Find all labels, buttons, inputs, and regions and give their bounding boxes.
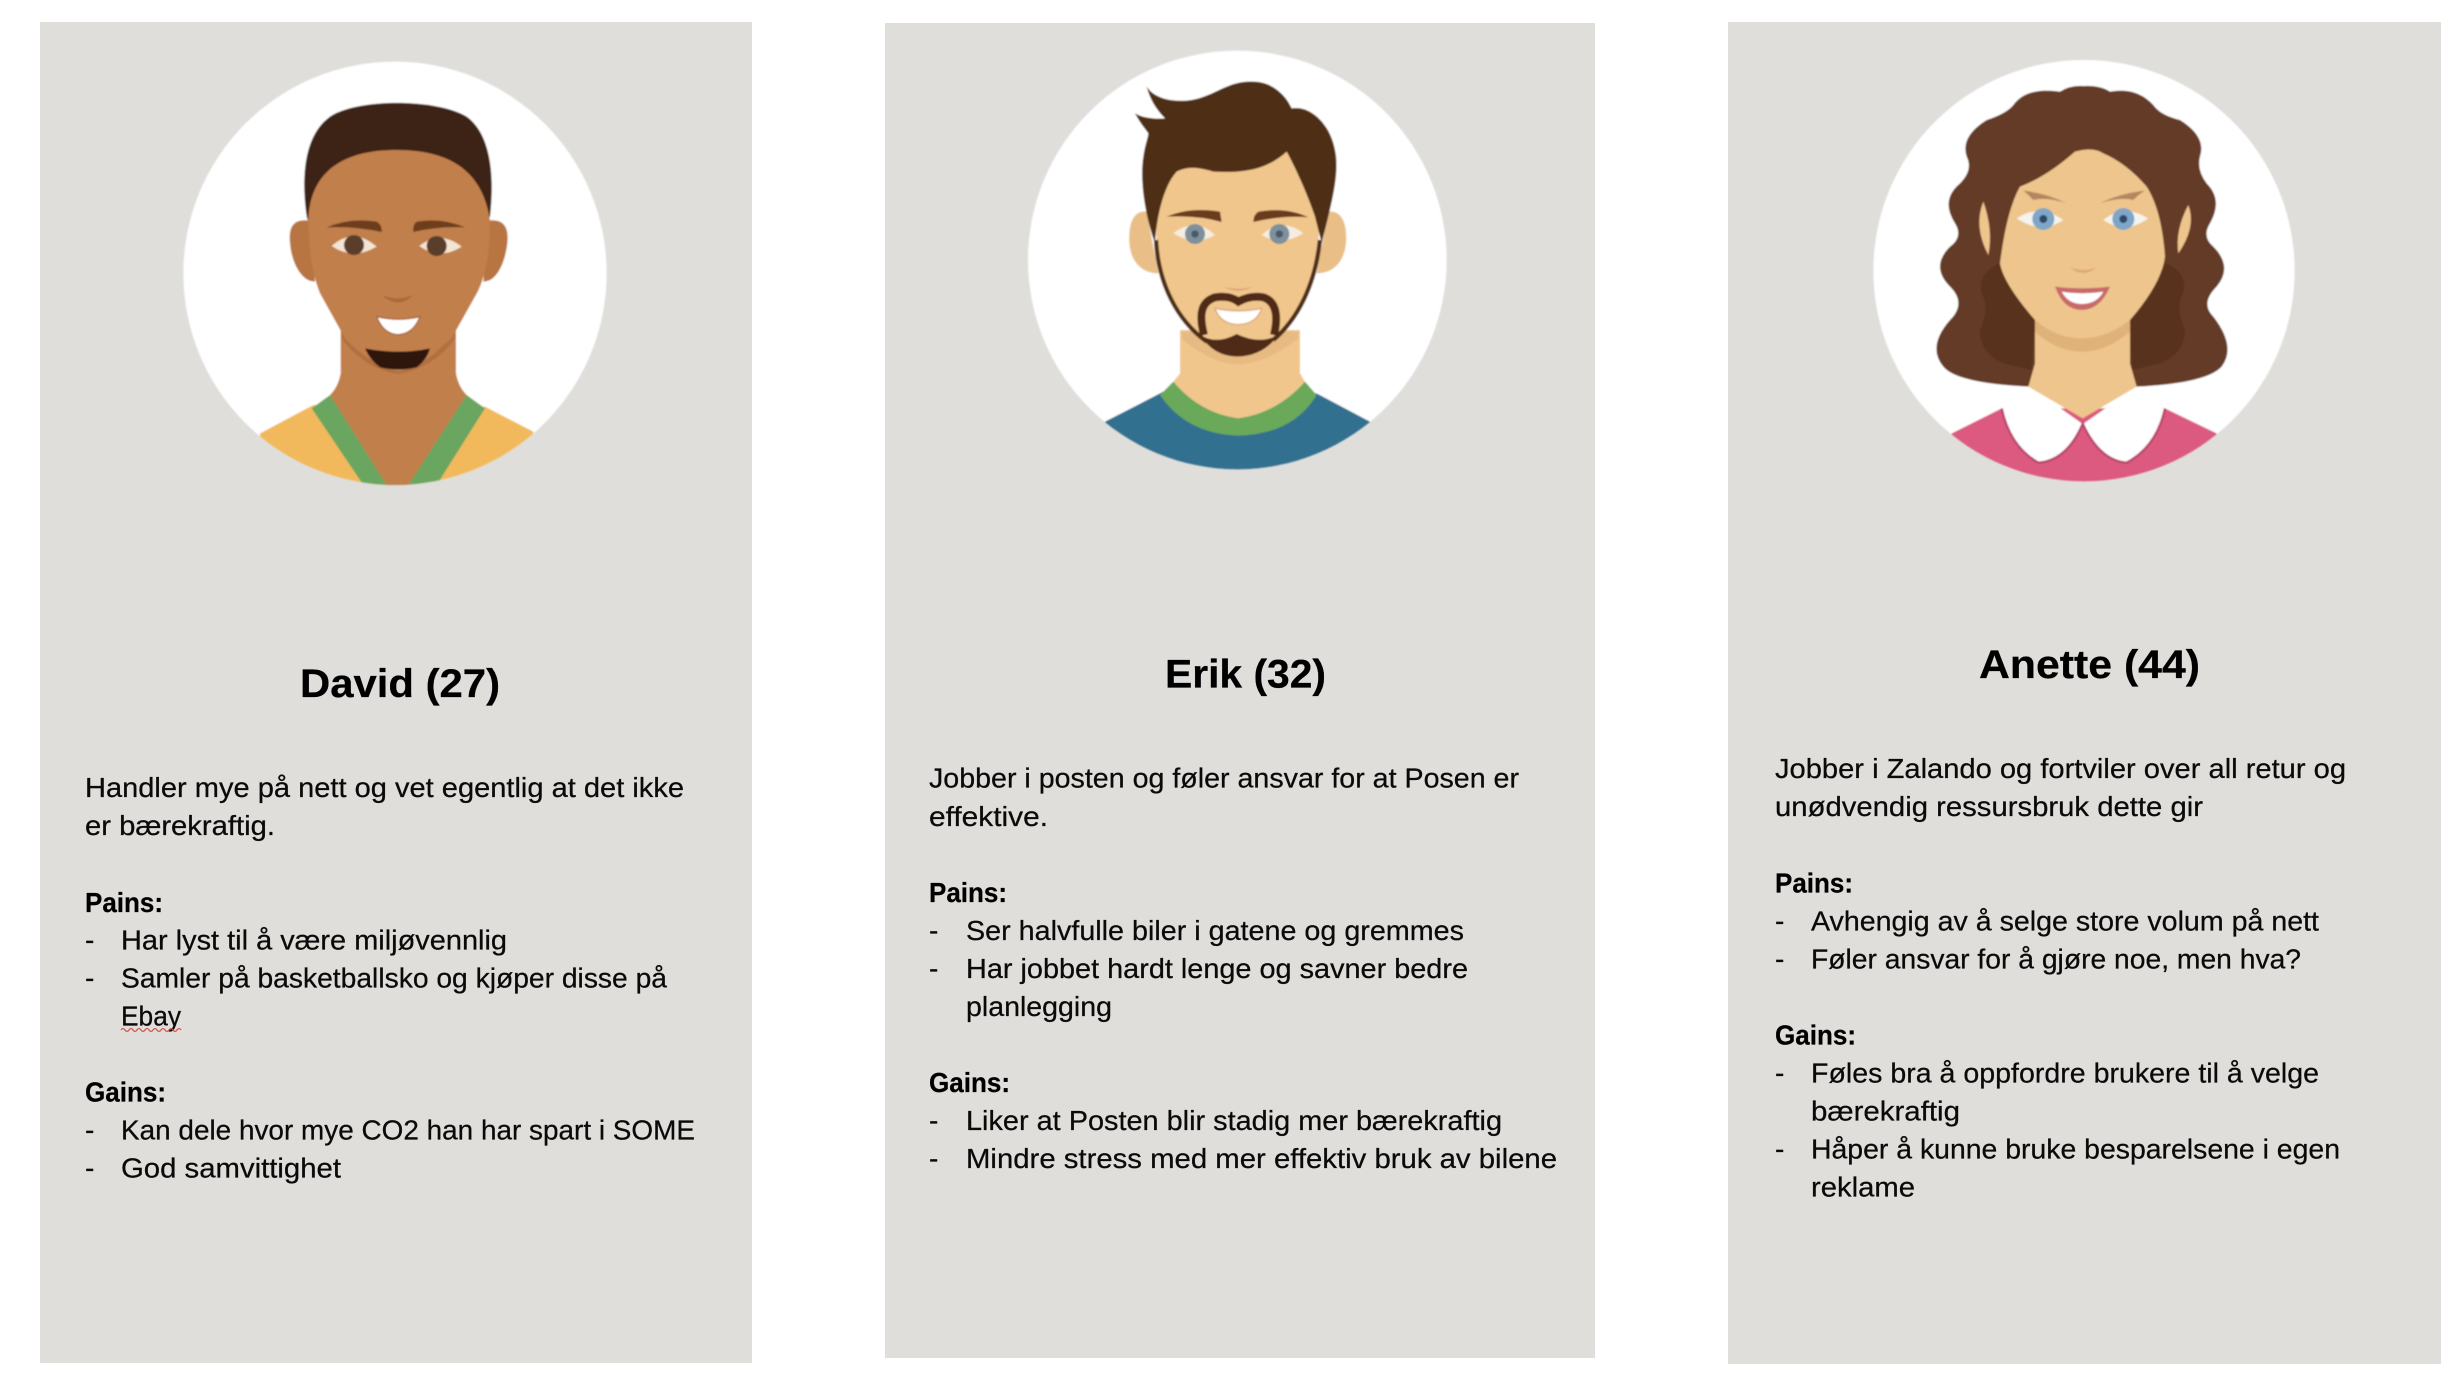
panel: Anette <box>1728 22 2441 1364</box>
text block: Erik description and lists: Har jobbet hardt lenge og savner bedre <box>966 953 1468 984</box>
text block: Erik description and lists: Liker at Posten blir stadig mer bærekraftig <box>966 1105 1502 1136</box>
card background: Erik <box>885 23 1595 1358</box>
text block: Anette description and lists: - <box>1775 1058 1784 1088</box>
text block: Anette description and lists: unødvendig ressursbruk dette gir <box>1775 791 2203 822</box>
text block: David description and lists: Gains: <box>85 1076 166 1108</box>
text block: David description and lists: - <box>85 1152 94 1184</box>
text block: Anette description and lists: Føler ansvar for å gjøre noe, men hva? <box>1811 944 2301 974</box>
avatar: Erik <box>1028 51 1447 497</box>
text block: David description and lists: Kan dele hvor mye CO2 han har spart i SOME <box>121 1114 695 1146</box>
panel: David <box>40 22 752 1363</box>
text block: Erik description and lists: effektive. <box>929 801 1048 832</box>
text block: Erik description and lists: Pains: <box>929 877 1007 908</box>
text block: Erik description and lists: planlegging <box>966 991 1112 1022</box>
avatar: David <box>183 62 607 497</box>
text block: Anette description and lists: reklame <box>1811 1172 1915 1202</box>
text block: David description and lists: Ebay <box>121 1000 181 1032</box>
text block: Erik description and lists: Ser halvfulle biler i gatene og gremmes <box>966 915 1464 946</box>
text block: David description and lists: - <box>85 962 94 994</box>
text block: Anette description and lists: Pains: <box>1775 868 1853 898</box>
heading: David (27): David (27) <box>300 662 500 706</box>
text block: Erik description and lists: - <box>929 915 938 946</box>
card background: Anette <box>1728 22 2441 1364</box>
text block: Anette description and lists: Jobber i Zalando og fortviler over all retur og <box>1775 753 2346 784</box>
text block: David description and lists: Pains: <box>85 887 163 918</box>
heading: Anette (44): Anette (44) <box>1979 643 2200 687</box>
text block: David description and lists: Samler på basketballsko og kjøper disse på <box>121 962 667 994</box>
card background: David <box>40 22 752 1363</box>
text block: Anette description and lists: - <box>1775 1134 1784 1164</box>
text block: Anette description and lists: Avhengig av å selge store volum på nett <box>1811 906 2319 936</box>
text block: David description and lists: - <box>85 924 94 956</box>
text block: Anette description and lists <box>1775 753 2346 1202</box>
text block: David description and lists: Handler mye på nett og vet egentlig at det ikke <box>85 772 684 803</box>
text block: Erik description and lists: - <box>929 1105 938 1136</box>
text block: Anette description and lists: bærekraftig <box>1811 1096 1960 1126</box>
text block: Anette description and lists: Gains: <box>1775 1020 1856 1050</box>
text block: Erik description and lists: Gains: <box>929 1067 1010 1098</box>
text block: David description and lists: God samvittighet <box>121 1152 341 1184</box>
text block: Anette description and lists: Føles bra å oppfordre brukere til å velge <box>1811 1058 2319 1088</box>
avatar: Anette <box>1873 60 2295 497</box>
text block: Erik description and lists: - <box>929 953 938 984</box>
text block: Anette description and lists: - <box>1775 944 1784 974</box>
text block: Anette description and lists: Håper å kunne bruke besparelsene i egen <box>1811 1134 2340 1164</box>
heading: Erik (32): Erik (32) <box>1165 652 1326 696</box>
text block: David description and lists <box>85 772 695 1184</box>
text block: David description and lists: er bærekraftig. <box>85 810 275 841</box>
text block: Erik description and lists <box>929 762 1557 1174</box>
text block: David description and lists: - <box>85 1114 94 1146</box>
text block: David description and lists: Har lyst til å være miljøvennlig <box>121 924 507 956</box>
text block: Erik description and lists: Mindre stress med mer effektiv bruk av bilene <box>966 1143 1557 1174</box>
text block: Erik description and lists: - <box>929 1143 938 1174</box>
text block: Anette description and lists: - <box>1775 906 1784 936</box>
text block: Erik description and lists: Jobber i posten og føler ansvar for at Posen er <box>929 762 1519 794</box>
panel: Erik <box>885 23 1595 1358</box>
